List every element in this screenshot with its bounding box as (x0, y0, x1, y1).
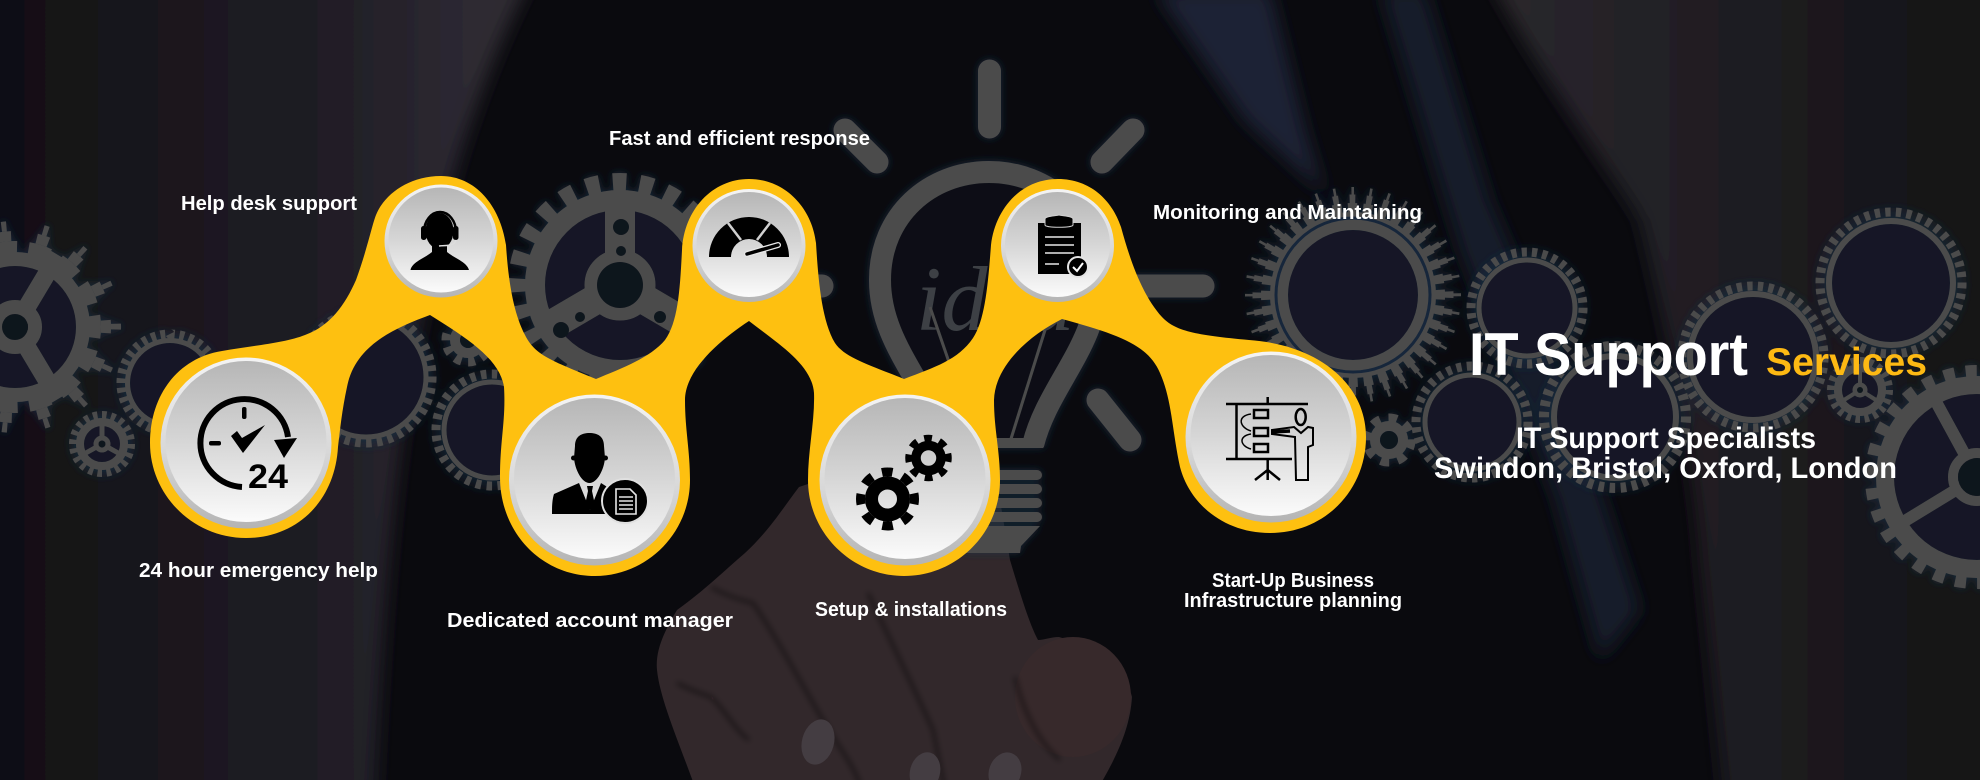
gear: left medium (121, 334, 219, 432)
gear: spiky far left (0, 226, 116, 428)
gear: top right (1820, 212, 1962, 354)
label: Fast and efficient response: Fast and efficient response (609, 128, 870, 150)
gear: behind first link (300, 311, 432, 443)
gear: right of presenter (1416, 366, 1528, 478)
gear: small right spoked (1831, 361, 1889, 419)
node: start-up business infrastructure planning (1186, 352, 1356, 522)
node: dedicated account manager (509, 394, 680, 566)
icon: speed gauge (709, 217, 789, 257)
title: IT Support Services: Services (1766, 341, 1927, 384)
icon: clipboard with check (1038, 215, 1088, 277)
icon: manager with document (552, 433, 648, 523)
gear: large centre spoked (517, 182, 723, 388)
hand pointing at the diagram (657, 470, 1132, 780)
gear: upper right of presenter (1471, 252, 1583, 364)
subtitle: specialists and locations (1434, 422, 1897, 485)
gear: small left spoked (73, 415, 131, 473)
gear: behind Services (1682, 286, 1824, 428)
node: setup and installations (820, 394, 990, 566)
label: Dedicated account manager: Dedicated account manager (447, 610, 733, 632)
label: Help desk support: Help desk support (181, 193, 357, 215)
title: IT Support Services (1469, 321, 1927, 388)
gear: behind tagline (1544, 346, 1686, 488)
icon: presenter at flip board (1226, 397, 1313, 480)
label: 24 hour emergency help: 24 hour emergency help (139, 560, 378, 582)
gear: small cog beside presenter (1367, 418, 1411, 462)
yellow connecting ribbon (150, 176, 1366, 576)
icon: 24 hour clock: 24 (248, 458, 288, 496)
icon: headset agent (410, 212, 469, 270)
node: help desk support (384, 184, 498, 298)
gear: large far right spoked (1872, 372, 1980, 582)
subtitle: specialists and locations: Swindon, Bristol, Oxford, London (1434, 452, 1897, 485)
icon: light bulb with rays (790, 71, 1203, 553)
node: fast and efficient response (692, 189, 806, 302)
background illustration: gears and light bulb (0, 71, 1980, 582)
label: Start-Up Business Infrastructure planning: Infrastructure planning (1184, 590, 1402, 612)
label: Start-Up Business Infrastructure planning (1184, 570, 1402, 612)
icon: light bulb with rays: idea (916, 248, 1074, 350)
gear: small behind first link (446, 318, 490, 362)
gear: spiky right of bulb (1249, 191, 1457, 399)
subtitle: specialists and locations: IT Support Specialists (1516, 422, 1816, 455)
label: Start-Up Business Infrastructure planning: Start-Up Business (1212, 570, 1374, 592)
icon: two gears (860, 438, 948, 526)
label: Setup & installations: Setup & installations (815, 599, 1007, 621)
node: monitoring and maintaining (1001, 189, 1114, 302)
gear: below second link (436, 374, 548, 486)
node: 24 hour emergency help (160, 358, 332, 528)
icon: 24 hour clock (200, 399, 297, 496)
title: IT Support Services: IT Support (1469, 321, 1748, 388)
label: Monitoring and Maintaining: Monitoring and Maintaining (1153, 202, 1422, 224)
